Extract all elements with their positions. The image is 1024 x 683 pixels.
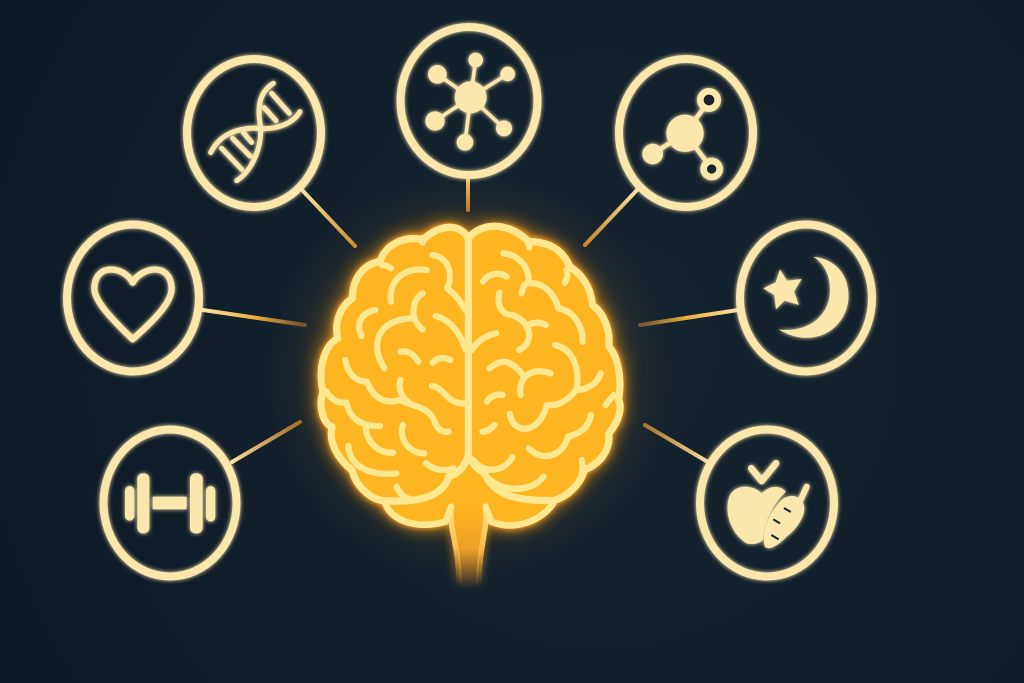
right folds bbox=[503, 253, 583, 342]
right hemisphere outline bbox=[468, 226, 620, 501]
icon ring: sleep bbox=[740, 224, 872, 372]
brain illustration bbox=[321, 226, 620, 590]
icon: hub and spoke network bbox=[425, 53, 515, 151]
brain tight glow bbox=[321, 227, 620, 525]
right lower lobe bbox=[491, 503, 553, 525]
icon: heart bbox=[94, 269, 172, 339]
icon ring: DNA bbox=[187, 59, 321, 207]
icon: moon and star bbox=[763, 257, 849, 338]
icon: DNA helix bbox=[211, 83, 300, 181]
connector lines bbox=[203, 180, 738, 462]
brain fill bbox=[321, 227, 620, 525]
brain stem glow bbox=[444, 510, 493, 590]
icon ring: network bbox=[400, 27, 538, 175]
left folds bbox=[432, 255, 465, 310]
brain glow bbox=[264, 170, 674, 580]
icon ring: heart bbox=[67, 224, 199, 372]
left lower lobe bbox=[385, 503, 446, 525]
icon ring: exercise bbox=[104, 430, 236, 576]
left hemisphere outline bbox=[321, 227, 468, 501]
brain outline and folds bbox=[321, 226, 620, 583]
icon ring: nutrition bbox=[700, 430, 834, 576]
icon: molecule bbox=[642, 91, 720, 177]
midline bbox=[457, 238, 479, 455]
icon: dumbbell bbox=[125, 473, 215, 533]
icon ring: molecule bbox=[619, 59, 753, 207]
icon: apple and carrot bbox=[727, 463, 807, 548]
brain wide glow bbox=[321, 227, 620, 525]
stem edges bbox=[451, 507, 459, 583]
brain stem bbox=[450, 503, 486, 588]
